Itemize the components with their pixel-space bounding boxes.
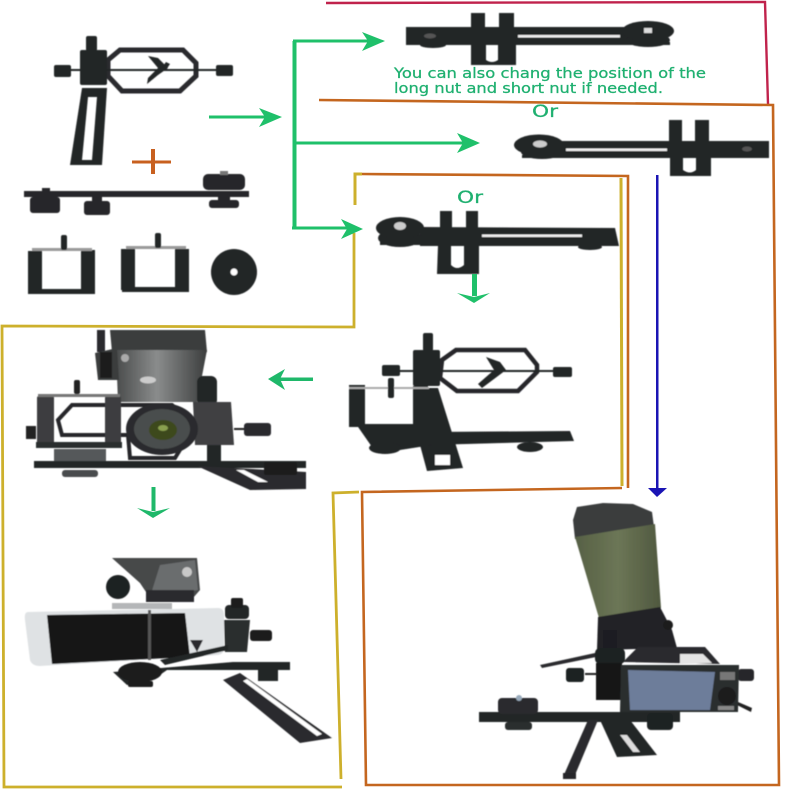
arrow: branching connector to three options bbox=[292, 32, 480, 239]
label: Or second option: Or bbox=[532, 102, 558, 122]
photo: bar option two bbox=[514, 120, 769, 176]
panel border: gold option three right bbox=[621, 178, 622, 486]
photo: mounting bar with nuts bbox=[24, 171, 249, 215]
photo: camera mounted on spotting scope bbox=[479, 503, 754, 779]
photo: adapter mounted on telescope eyepiece bbox=[26, 330, 306, 490]
arrow: left to first scene bbox=[268, 369, 313, 390]
panel border: red option one bbox=[326, 2, 768, 104]
arrow: down to assembled adapter bbox=[457, 274, 490, 303]
photo: smartphone mounted on telescope bbox=[25, 558, 332, 743]
arrow: parts to options bbox=[209, 108, 282, 127]
note: position of nuts bbox=[393, 66, 706, 97]
photo: bar option three bbox=[376, 211, 619, 274]
clamp two bbox=[121, 233, 189, 292]
label: Or third option: Or bbox=[457, 188, 483, 208]
photo: digiscoping adapter bbox=[54, 36, 233, 165]
photo: bar option one bbox=[406, 13, 674, 65]
arrow: down to smartphone scene bbox=[137, 487, 170, 518]
photo: phone clamps and washer bbox=[28, 233, 257, 295]
arrow: blue down to final result bbox=[648, 175, 667, 497]
panel border: gold option three bbox=[355, 174, 362, 205]
clamp one bbox=[28, 235, 95, 294]
washer bbox=[211, 249, 257, 295]
plus sign bbox=[132, 149, 171, 174]
panel border: orange option three bbox=[362, 174, 628, 488]
photo: assembled adapter with clamp bbox=[349, 333, 574, 471]
panel border: gold smartphone steps bbox=[2, 233, 354, 787]
panel border: orange option two and final result bbox=[319, 100, 779, 785]
panel border: gold inner divider bbox=[333, 492, 359, 779]
note: position of nuts: long nut and short nut if needed. bbox=[394, 81, 663, 97]
note: position of nuts: You can also chang the position of the bbox=[393, 66, 706, 82]
